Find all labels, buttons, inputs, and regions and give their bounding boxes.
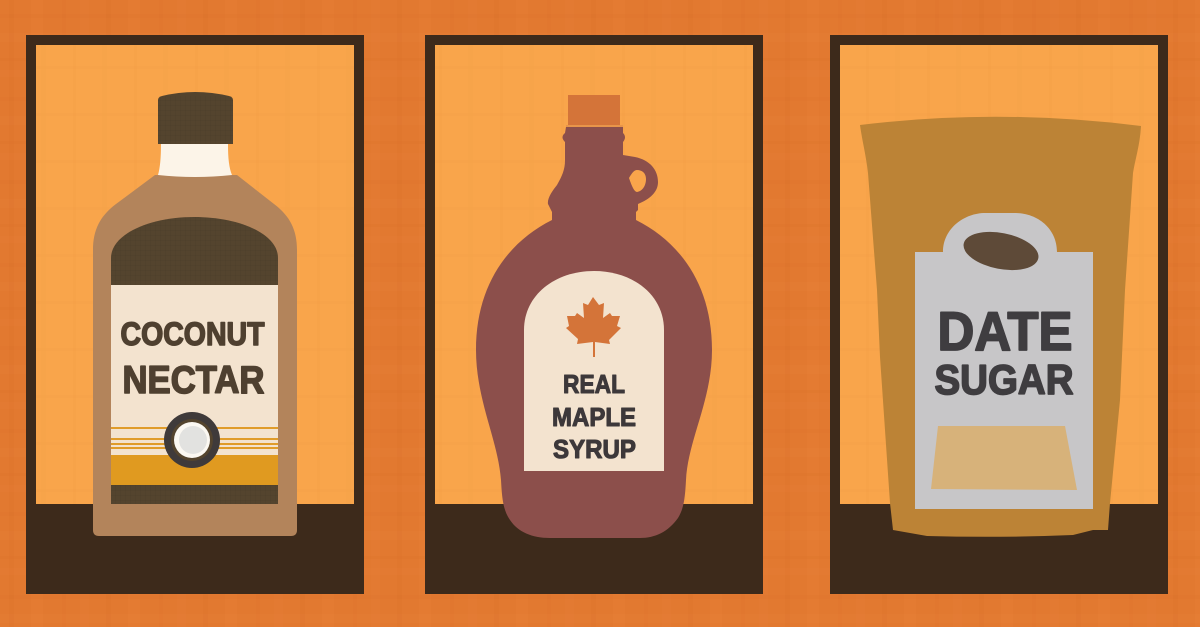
label text	[934, 300, 1074, 403]
panel: date sugar	[830, 35, 1168, 594]
label text: SYRUP	[553, 434, 636, 464]
label text: COCONUT	[120, 316, 265, 352]
icon: date sugar bag	[860, 117, 1141, 537]
label text: MAPLE	[552, 402, 636, 432]
icon: maple syrup jug	[476, 95, 712, 538]
panel: maple syrup	[425, 35, 763, 594]
tag patch	[931, 426, 1077, 490]
label text: DATE	[938, 300, 1072, 362]
tag hole	[960, 226, 1042, 276]
label text: REAL	[563, 369, 625, 399]
icon: coconut	[164, 412, 220, 468]
panel: coconut nectar	[26, 35, 364, 594]
icon: coconut nectar bottle	[93, 92, 297, 536]
label text	[552, 369, 636, 464]
icon: maple leaf	[566, 297, 621, 357]
label text	[120, 316, 265, 402]
label text: NECTAR	[122, 359, 264, 402]
tag	[915, 213, 1093, 509]
label text: SUGAR	[934, 356, 1074, 403]
